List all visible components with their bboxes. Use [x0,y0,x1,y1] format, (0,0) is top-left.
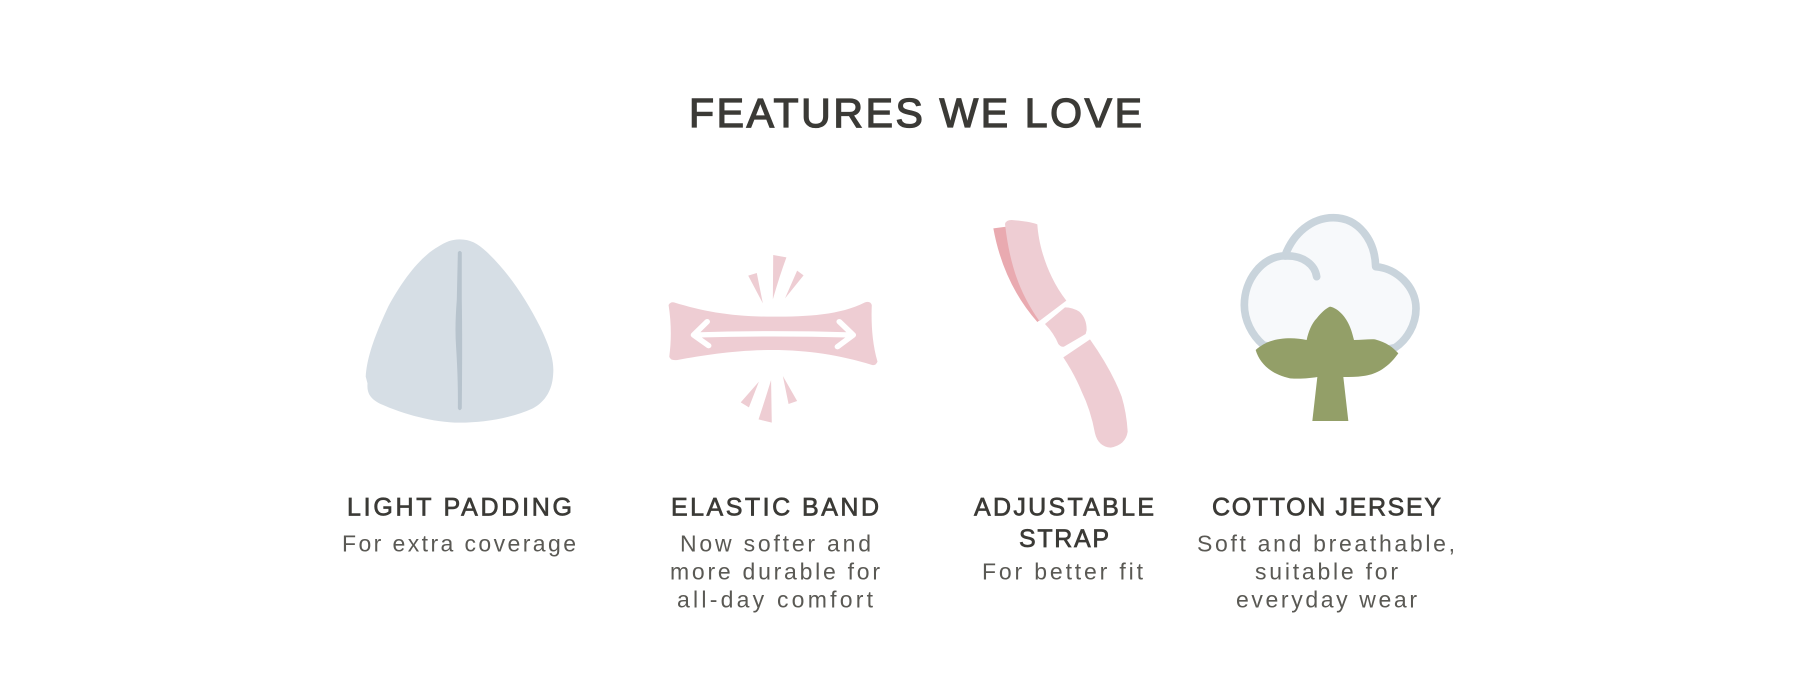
description: light padding: For extra coverage [342,530,576,556]
icon: adjustable strap [993,220,1128,448]
description: elastic band: more durable for [670,558,880,584]
description: cotton jersey: everyday wear [1236,586,1417,612]
heading: elastic band: ELASTIC BAND [671,494,879,522]
heading: adjustable strap: STRAP [1019,525,1109,553]
description: adjustable strap: For better fit [982,558,1144,584]
description: elastic band: Now softer and [680,530,871,556]
icon: cotton boll [1244,218,1416,421]
description: cotton jersey: Soft and breathable, [1197,530,1455,556]
panel: adjustable strap [974,220,1154,585]
heading: cotton jersey: COTTON JERSEY [1212,494,1441,522]
icon: padding cup [366,239,553,423]
panel: cotton jersey [1197,218,1455,612]
description: cotton jersey: suitable for [1255,558,1398,584]
description: elastic band: all-day comfort [677,586,874,612]
description: cotton jersey [1197,530,1455,612]
description: elastic band [670,530,880,612]
icon: stretching elastic band [669,255,877,423]
heading: light padding: LIGHT PADDING [347,494,572,522]
heading: adjustable strap: ADJUSTABLE [974,494,1154,522]
panel: light padding [342,239,576,556]
panel: elastic band [669,255,880,612]
heading: adjustable strap [974,494,1154,553]
title: FEATURES WE LOVE [689,90,1142,136]
